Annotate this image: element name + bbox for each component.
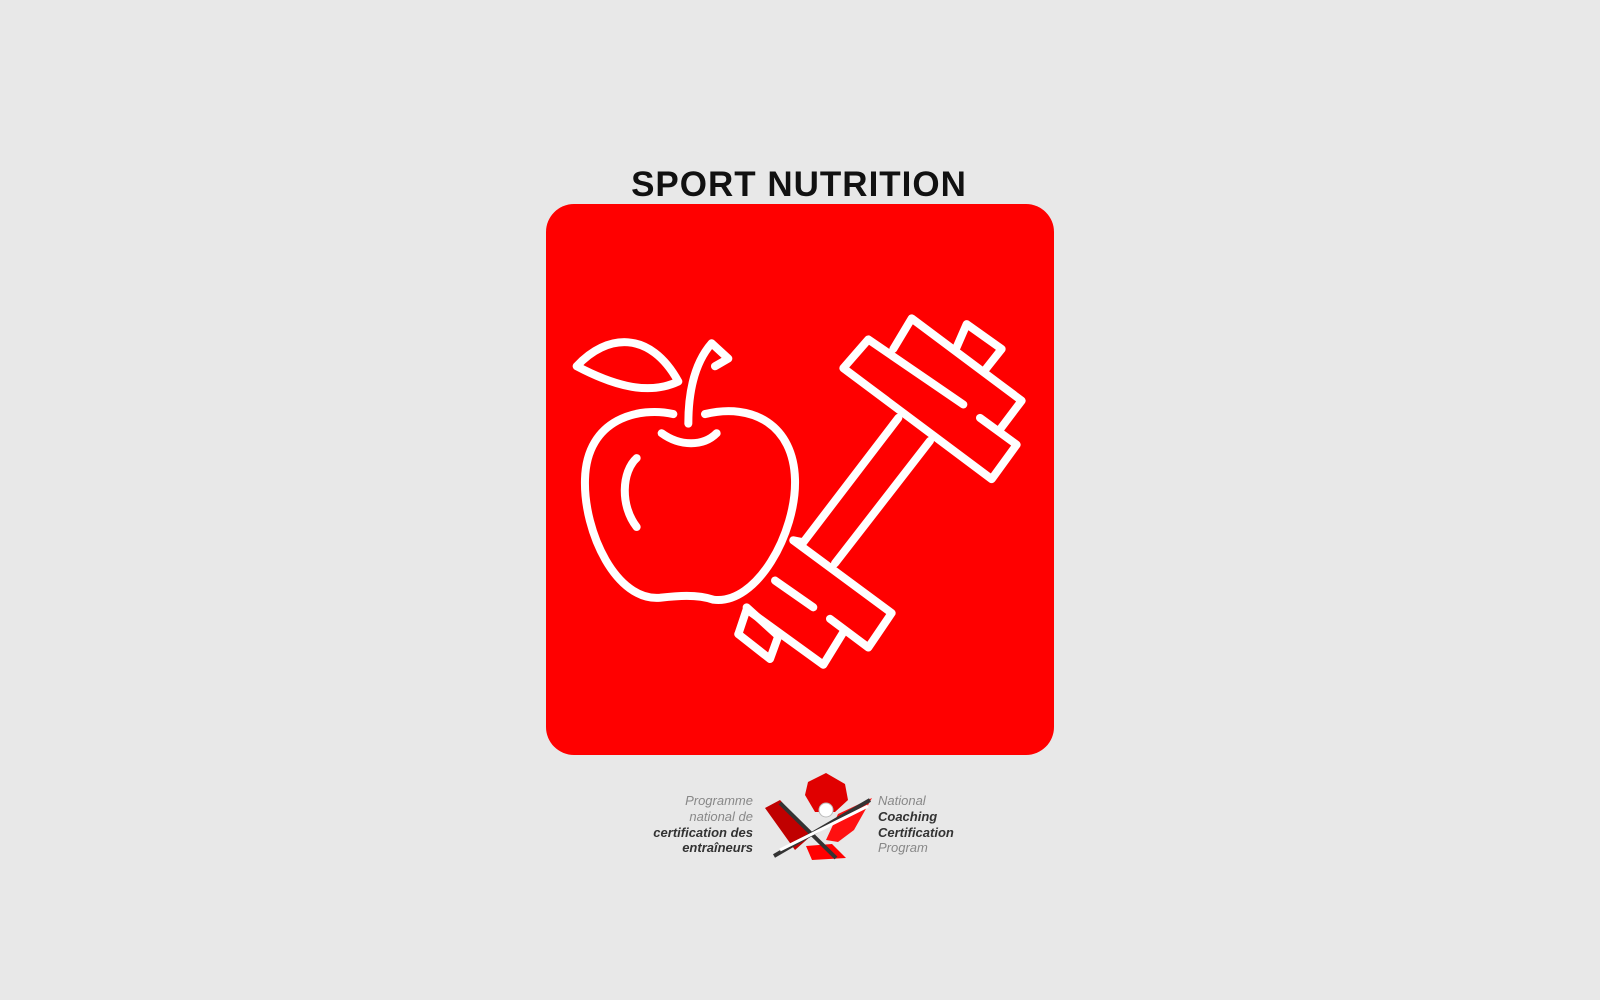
logo text: English: Program (878, 840, 928, 855)
icon: apple and dumbbell (577, 318, 1022, 665)
logo text: English: Coaching (878, 809, 937, 824)
logo text: French: certification des (653, 825, 753, 840)
logo text: French (653, 793, 753, 855)
logo text: French: entraîneurs (682, 840, 753, 855)
logo text: English: National (878, 793, 927, 808)
icon: dumbbell (738, 318, 1022, 665)
title: SPORT NUTRITION (631, 165, 967, 204)
icon: apple (577, 342, 795, 600)
logo: NCCP (653, 773, 954, 860)
logo text: French: national de (689, 809, 753, 824)
logo text: English: Certification (878, 825, 954, 840)
logo text: French: Programme (685, 793, 753, 808)
logo mark (765, 773, 872, 860)
logo text: English (878, 793, 954, 855)
panel: red icon tile (546, 204, 1054, 755)
